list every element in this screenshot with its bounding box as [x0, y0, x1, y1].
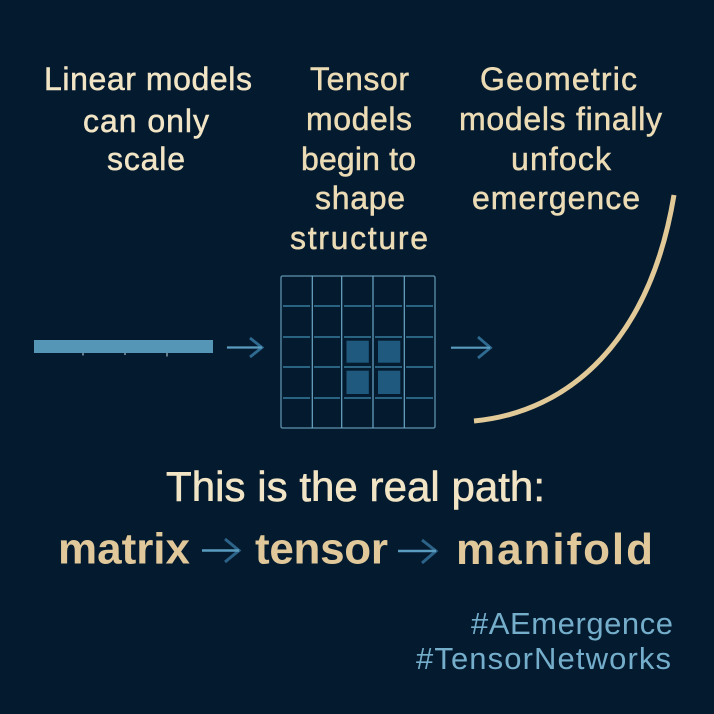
hashtags: #TensorNetworks: [416, 641, 671, 676]
path equation: tensor: [255, 524, 388, 574]
text: geometric models caption: models finally: [459, 101, 662, 137]
text: geometric models caption: Geometric: [480, 61, 637, 97]
text: linear models caption: scale: [107, 141, 185, 177]
heading: real path: This is the real path:: [166, 463, 545, 510]
path equation: [58, 524, 653, 574]
text: linear models caption: Linear models: [44, 61, 252, 97]
arrow: matrix to tensor: [202, 539, 239, 562]
highlighted grid cells: [346, 341, 400, 394]
text: tensor models caption: models: [306, 101, 412, 137]
text: tensor models caption: structure: [290, 220, 428, 256]
linear bar: [34, 340, 213, 356]
text: tensor models caption: [290, 61, 428, 256]
text: tensor models caption: begin to: [301, 141, 416, 177]
hashtags: #AEmergence: [471, 606, 673, 641]
manifold curve: [474, 195, 674, 421]
text: tensor models caption: shape: [315, 180, 405, 216]
text: geometric models caption: [459, 61, 662, 216]
text: geometric models caption: emergence: [472, 180, 640, 216]
path equation: matrix: [58, 524, 191, 574]
path equation: manifold: [456, 525, 653, 574]
tensor grid: [281, 276, 435, 428]
text: tensor models caption: Tensor: [310, 61, 409, 97]
arrow: tensor to manifold: [398, 540, 436, 563]
text: geometric models caption: unfock: [511, 141, 612, 177]
hashtags: [416, 606, 673, 676]
text: linear models caption: can only: [83, 103, 209, 139]
arrow: linear to tensor: [227, 338, 262, 357]
arrow: tensor to curve: [451, 337, 490, 358]
text: linear models caption: [44, 61, 252, 177]
